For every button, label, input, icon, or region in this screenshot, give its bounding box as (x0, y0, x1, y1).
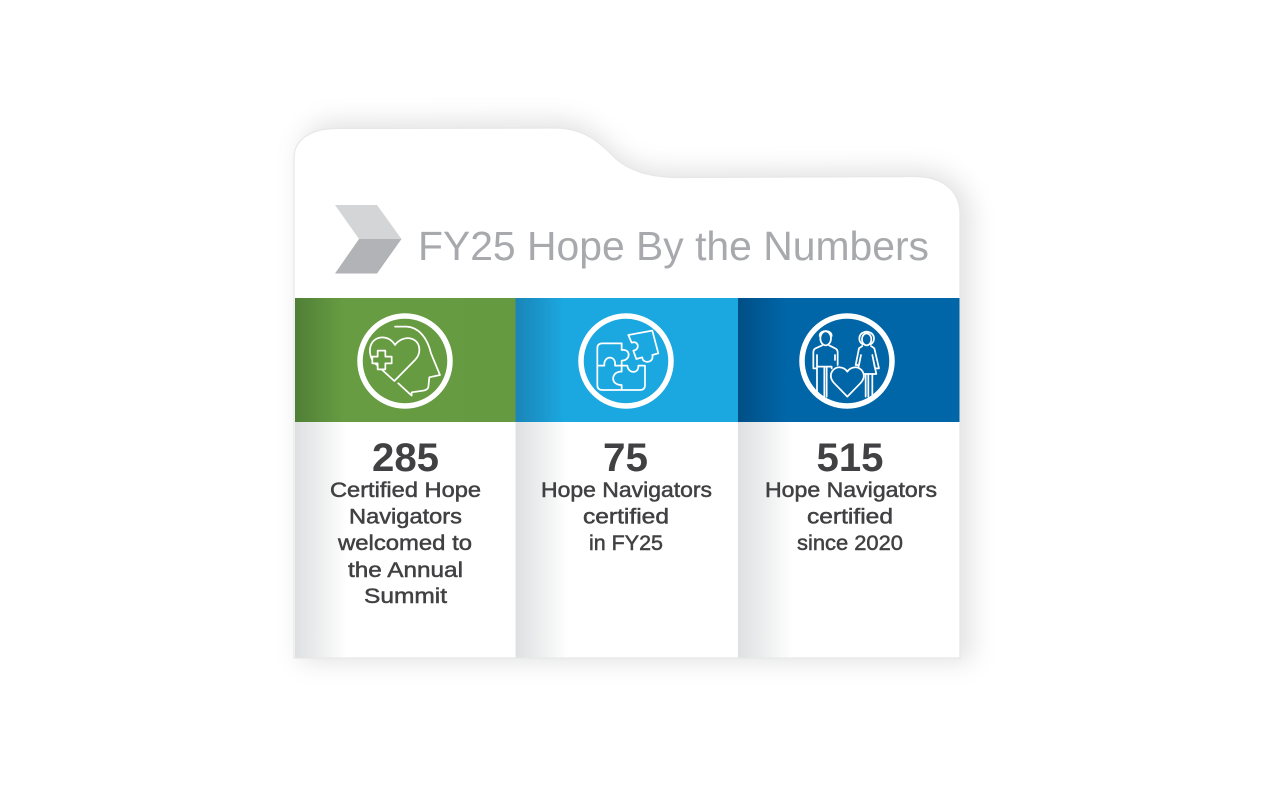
title: FY25 Hope By the Numbers (418, 223, 929, 269)
dark blue band (738, 298, 960, 422)
label: hope navigators certified in FY25: Hope Navigators (541, 478, 712, 502)
column shading (295, 422, 347, 658)
green band (295, 298, 516, 422)
icon: head with heart (360, 316, 450, 406)
panel: certified in FY25 (516, 298, 738, 658)
column shading (516, 422, 568, 658)
number: 515: 515 (816, 436, 884, 480)
label: hope navigators certified since 2020: Hope Navigators (765, 478, 937, 502)
icon: puzzle (581, 316, 671, 406)
label: hope navigators certified in FY25: certified (583, 504, 669, 528)
blue band (516, 298, 738, 422)
label: certified hope navigators: the Annual (348, 558, 463, 582)
label: certified hope navigators: Navigators (349, 504, 462, 528)
label: hope navigators certified in FY25 (541, 478, 712, 555)
panel: summit (295, 298, 516, 658)
column shading (738, 422, 793, 658)
label: hope navigators certified since 2020 (765, 478, 937, 555)
icon: chevron (335, 205, 402, 274)
number: 75: 75 (603, 436, 648, 480)
icon: two people with heart (802, 316, 892, 406)
label: certified hope navigators (330, 478, 481, 608)
panel: certified since 2020 (738, 298, 960, 658)
label: hope navigators certified since 2020: certified (807, 504, 893, 528)
label: certified hope navigators: Certified Hope (330, 478, 481, 502)
folder card (294, 128, 960, 658)
number: 285: 285 (372, 436, 439, 480)
folder shadow (300, 120, 972, 662)
label: hope navigators certified in FY25: in FY25 (589, 531, 663, 555)
label: certified hope navigators: Summit (364, 584, 447, 608)
label: certified hope navigators: welcomed to (337, 531, 472, 555)
label: hope navigators certified since 2020: since 2020 (797, 531, 903, 555)
